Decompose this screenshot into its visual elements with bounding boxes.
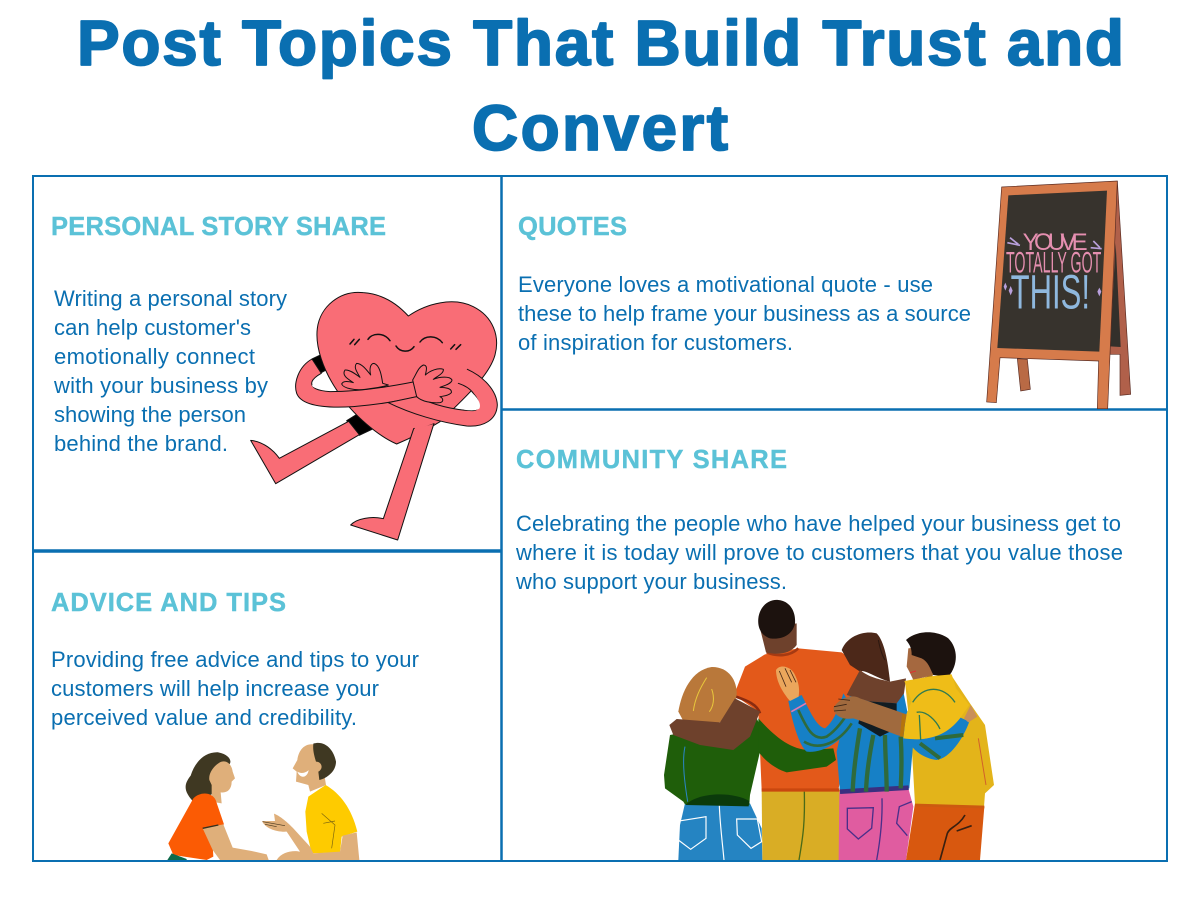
back leg bbox=[1017, 359, 1030, 391]
heading: advice and tips: ADVICE AND TIPS bbox=[51, 589, 286, 617]
panel: advice and tips bbox=[51, 589, 419, 860]
man arm bbox=[262, 814, 359, 860]
text block: quotes: Everyone loves a motivational quote - use bbox=[518, 272, 933, 297]
centre person shirt bbox=[734, 648, 863, 790]
right person neck and head bbox=[907, 645, 933, 680]
back arm straps bbox=[312, 355, 327, 374]
front frame bbox=[987, 181, 1117, 409]
right leg bbox=[351, 423, 434, 540]
text block: quotes: of inspiration for customers. bbox=[518, 330, 793, 355]
text block: personal story bbox=[53, 286, 287, 456]
woman arm bbox=[203, 824, 269, 860]
text block: advice: Providing free advice and tips to your bbox=[51, 647, 419, 672]
chalk text bbox=[1006, 229, 1101, 320]
right person jacket bbox=[905, 673, 994, 807]
text block: advice: customers will help increase your bbox=[51, 676, 379, 701]
left person sweater bbox=[664, 718, 765, 805]
text block: community: where it is today will prove to customers that you value those bbox=[515, 540, 1123, 565]
text block: personal story: emotionally connect bbox=[54, 344, 255, 369]
heading: quotes: QUOTES bbox=[518, 213, 627, 241]
man shirt bbox=[305, 785, 357, 853]
hands bbox=[342, 363, 388, 390]
illustration: two people talking bbox=[167, 743, 359, 860]
chalk text: YOU'VE bbox=[1023, 229, 1088, 256]
centre person hair bbox=[758, 600, 795, 639]
text block: community: who support your business. bbox=[515, 569, 787, 594]
left person jeans bbox=[678, 803, 762, 860]
woman shirt bbox=[168, 794, 224, 860]
left leg bbox=[251, 421, 359, 484]
icon: chalkboard sign bbox=[987, 181, 1131, 409]
woman hair bbox=[186, 752, 230, 803]
chalkboard surface bbox=[997, 191, 1107, 352]
text block: community: Celebrating the people who have helped your business get to bbox=[516, 511, 1121, 536]
centre person trousers bbox=[762, 790, 840, 860]
left person hair bbox=[678, 667, 737, 723]
text block: quotes: these to help frame your business as a source bbox=[518, 301, 971, 326]
text block: quotes bbox=[518, 272, 971, 355]
title: Convert bbox=[472, 92, 728, 164]
left arm loop bbox=[296, 359, 417, 407]
man head and neck bbox=[293, 744, 326, 792]
right person hair bbox=[906, 632, 956, 677]
right person collar and sleeve bbox=[903, 674, 969, 739]
middle person arm round centre bbox=[788, 693, 854, 752]
text block: advice: perceived value and credibility. bbox=[51, 705, 357, 730]
title bbox=[77, 7, 1124, 164]
right person arm bbox=[833, 696, 907, 737]
illustration: group of friends bbox=[664, 600, 994, 860]
icon: chalkboard sign: TOTALLY GOT bbox=[1006, 247, 1101, 280]
middle person trousers bbox=[839, 788, 913, 860]
text block: personal story: showing the person bbox=[54, 402, 246, 427]
heading: community share: COMMUNITY SHARE bbox=[516, 446, 787, 474]
middle person striped top bbox=[837, 692, 913, 792]
woman face and neck bbox=[209, 761, 235, 803]
text block: personal story: behind the brand. bbox=[54, 431, 228, 456]
text block: advice bbox=[51, 647, 419, 730]
icon: hugging heart bbox=[251, 292, 497, 540]
chalk text: THIS! bbox=[1011, 266, 1090, 320]
title: Post Topics That Build Trust and bbox=[77, 7, 1124, 79]
text block: personal story: with your business by bbox=[53, 373, 268, 398]
middle person far arm bbox=[910, 717, 969, 760]
panel: personal story share bbox=[51, 213, 497, 540]
man hair bbox=[313, 743, 336, 780]
panel grid bbox=[33, 176, 1167, 861]
back frame bbox=[1110, 181, 1131, 395]
text block: community bbox=[515, 511, 1123, 594]
centre person neck bbox=[760, 623, 797, 654]
right person trousers bbox=[906, 803, 984, 860]
left person far arm bbox=[758, 718, 836, 772]
middle person hand bbox=[776, 666, 799, 701]
middle person hair bbox=[842, 632, 890, 682]
text block: personal story: can help customer's bbox=[54, 315, 251, 340]
heading: personal story share: PERSONAL STORY SHARE bbox=[51, 213, 386, 241]
face bbox=[350, 334, 461, 351]
heart body bbox=[317, 292, 497, 444]
panel: quotes bbox=[518, 181, 1131, 409]
text block: personal story: Writing a personal story bbox=[54, 286, 287, 311]
panel: community share bbox=[515, 446, 1123, 860]
chalk sparks bbox=[1007, 238, 1102, 249]
left person arm across centre bbox=[669, 698, 760, 750]
right arm loop bbox=[388, 369, 497, 426]
white gaps bbox=[312, 373, 333, 389]
middle person shoulders bbox=[847, 670, 906, 703]
